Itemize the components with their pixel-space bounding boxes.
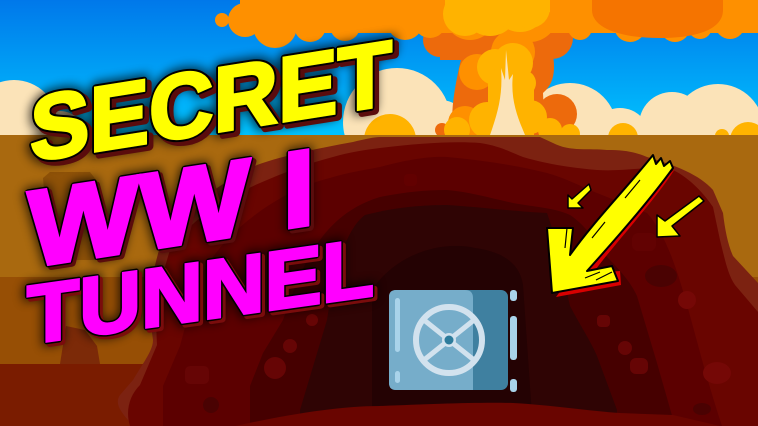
innermost dark [372,246,532,415]
mushroom stem dark [423,17,577,137]
second layer [128,142,758,426]
orange cap [215,0,758,48]
big arrow [547,155,675,297]
mushroom cloud [215,0,758,166]
icon: safe [389,290,517,392]
brown blob under title [43,172,100,260]
heading: TUNNEL: TUNNEL [27,221,374,362]
heading: TUNNEL: TUNNEL [30,223,377,364]
third layer [163,157,722,426]
mushroom body yellow [364,43,758,166]
heading: WW I: WW I [28,127,315,291]
title text [27,20,396,365]
fourth layer [250,190,675,426]
sky [0,0,758,136]
heading: SECRET: SECRET [30,21,392,181]
heading: WW I: WW I [28,127,315,291]
small arrow right [657,196,704,237]
yellow cap [443,0,550,36]
cream clouds [0,68,758,177]
heading: WW I: WW I [28,127,315,291]
heading: WW I: WW I [31,130,318,293]
outer layer [118,137,758,426]
cave layers [118,137,758,426]
inner layer [300,205,617,426]
dark rocks [203,265,711,415]
small arrow left [568,184,591,208]
rocks [185,174,656,384]
heading: SECRET: SECRET [30,21,392,181]
blast column [490,50,525,135]
ground strata [0,135,758,426]
lighter rocks right [678,291,731,384]
dark orange cap [592,0,723,38]
heading: TUNNEL: TUNNEL [27,221,374,362]
brown blob lower left [60,326,100,364]
arrows [547,155,704,297]
heading: TUNNEL: TUNNEL [27,221,374,362]
cave floor [235,403,720,426]
heading: SECRET: SECRET [34,24,396,185]
mushroom body orange [448,30,535,140]
heading: SECRET: SECRET [30,21,392,181]
